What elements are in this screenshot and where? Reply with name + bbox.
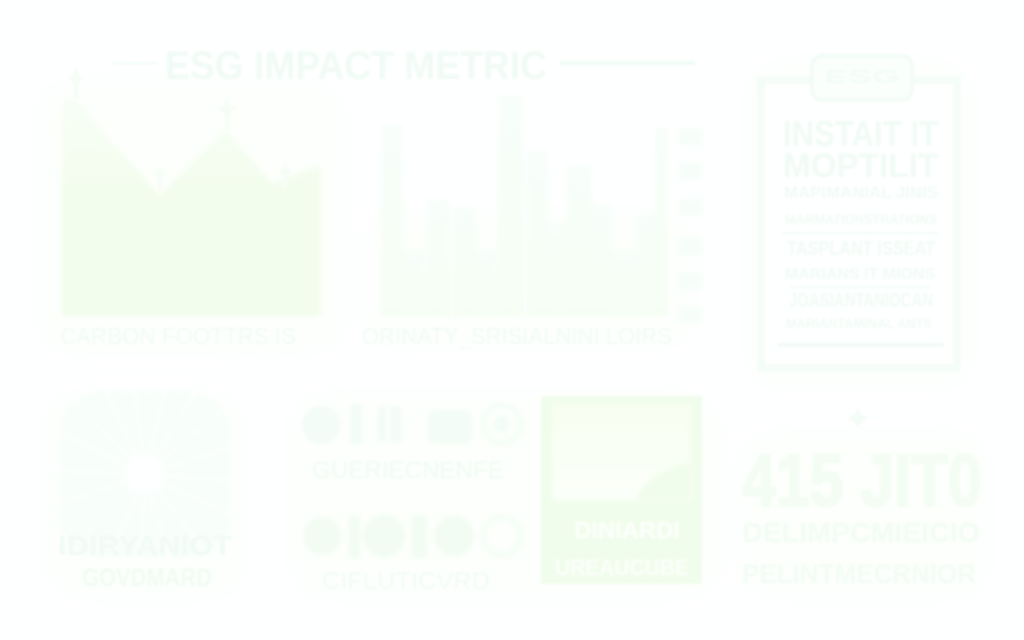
bars <box>381 95 668 316</box>
soft background glow <box>45 70 980 590</box>
clipboard text: MOPTILIT <box>783 147 938 185</box>
clipboard text <box>778 113 944 347</box>
panel: green landscape card <box>541 396 702 584</box>
icon: small leaf <box>847 408 869 428</box>
title: ESG IMPACT METRIC <box>165 44 547 88</box>
card heading: DINIARDI <box>574 517 680 543</box>
clipboard text: JOASIANTANIOCAN <box>789 290 933 312</box>
label: radial heading: IDIRYANIOT <box>58 530 232 561</box>
clipboard text: MARIANS IT MIONS <box>785 266 935 283</box>
icon: tree markers <box>67 66 292 192</box>
card sky image <box>553 405 691 500</box>
clipboard frame <box>761 80 957 368</box>
panel: bar chart <box>362 95 702 349</box>
panel: carbon footprint area chart <box>60 66 321 349</box>
card hill <box>635 462 691 500</box>
panel: clipboard summary <box>761 56 957 368</box>
side scale markers <box>678 128 702 324</box>
area chart <box>62 100 321 316</box>
clipboard tab <box>812 56 912 100</box>
panel: icon rows <box>302 404 521 595</box>
card background <box>541 396 702 584</box>
label: icon row one: GUERIECNENFE <box>312 457 504 484</box>
clipboard text: MARMATIONSTRATIONS <box>785 211 937 227</box>
panel: radial governance figure <box>52 388 238 592</box>
radial burst <box>52 388 238 560</box>
clipboard text: MAPIMANIAL JINIS <box>784 183 938 202</box>
icon row one <box>302 404 521 444</box>
label: carbon footprint: CARBON FOOTTRS IS <box>60 323 296 349</box>
label: icon row two: CIFLUTICVRD <box>322 568 490 595</box>
clipboard text: MARIANTAMINAL ANTS <box>786 315 932 331</box>
label: number caption two: PELINTMECRNIOR <box>742 559 976 589</box>
clipboard tab: ESG <box>824 67 900 87</box>
card subheading: UREAUCUBE <box>555 555 689 580</box>
clipboard text: TASPLANT ISSEAT <box>787 238 935 260</box>
label: bar chart caption: ORINATY_SRISIALNINI LOIRS <box>362 323 672 349</box>
label: radial subheading: GOVDMARD <box>82 564 212 592</box>
panel: key number <box>742 408 982 589</box>
label: number caption one: DELIMPCMIEICIO <box>742 517 980 548</box>
clipboard text: INSTAIT IT <box>783 113 938 154</box>
icon row two <box>303 515 521 558</box>
